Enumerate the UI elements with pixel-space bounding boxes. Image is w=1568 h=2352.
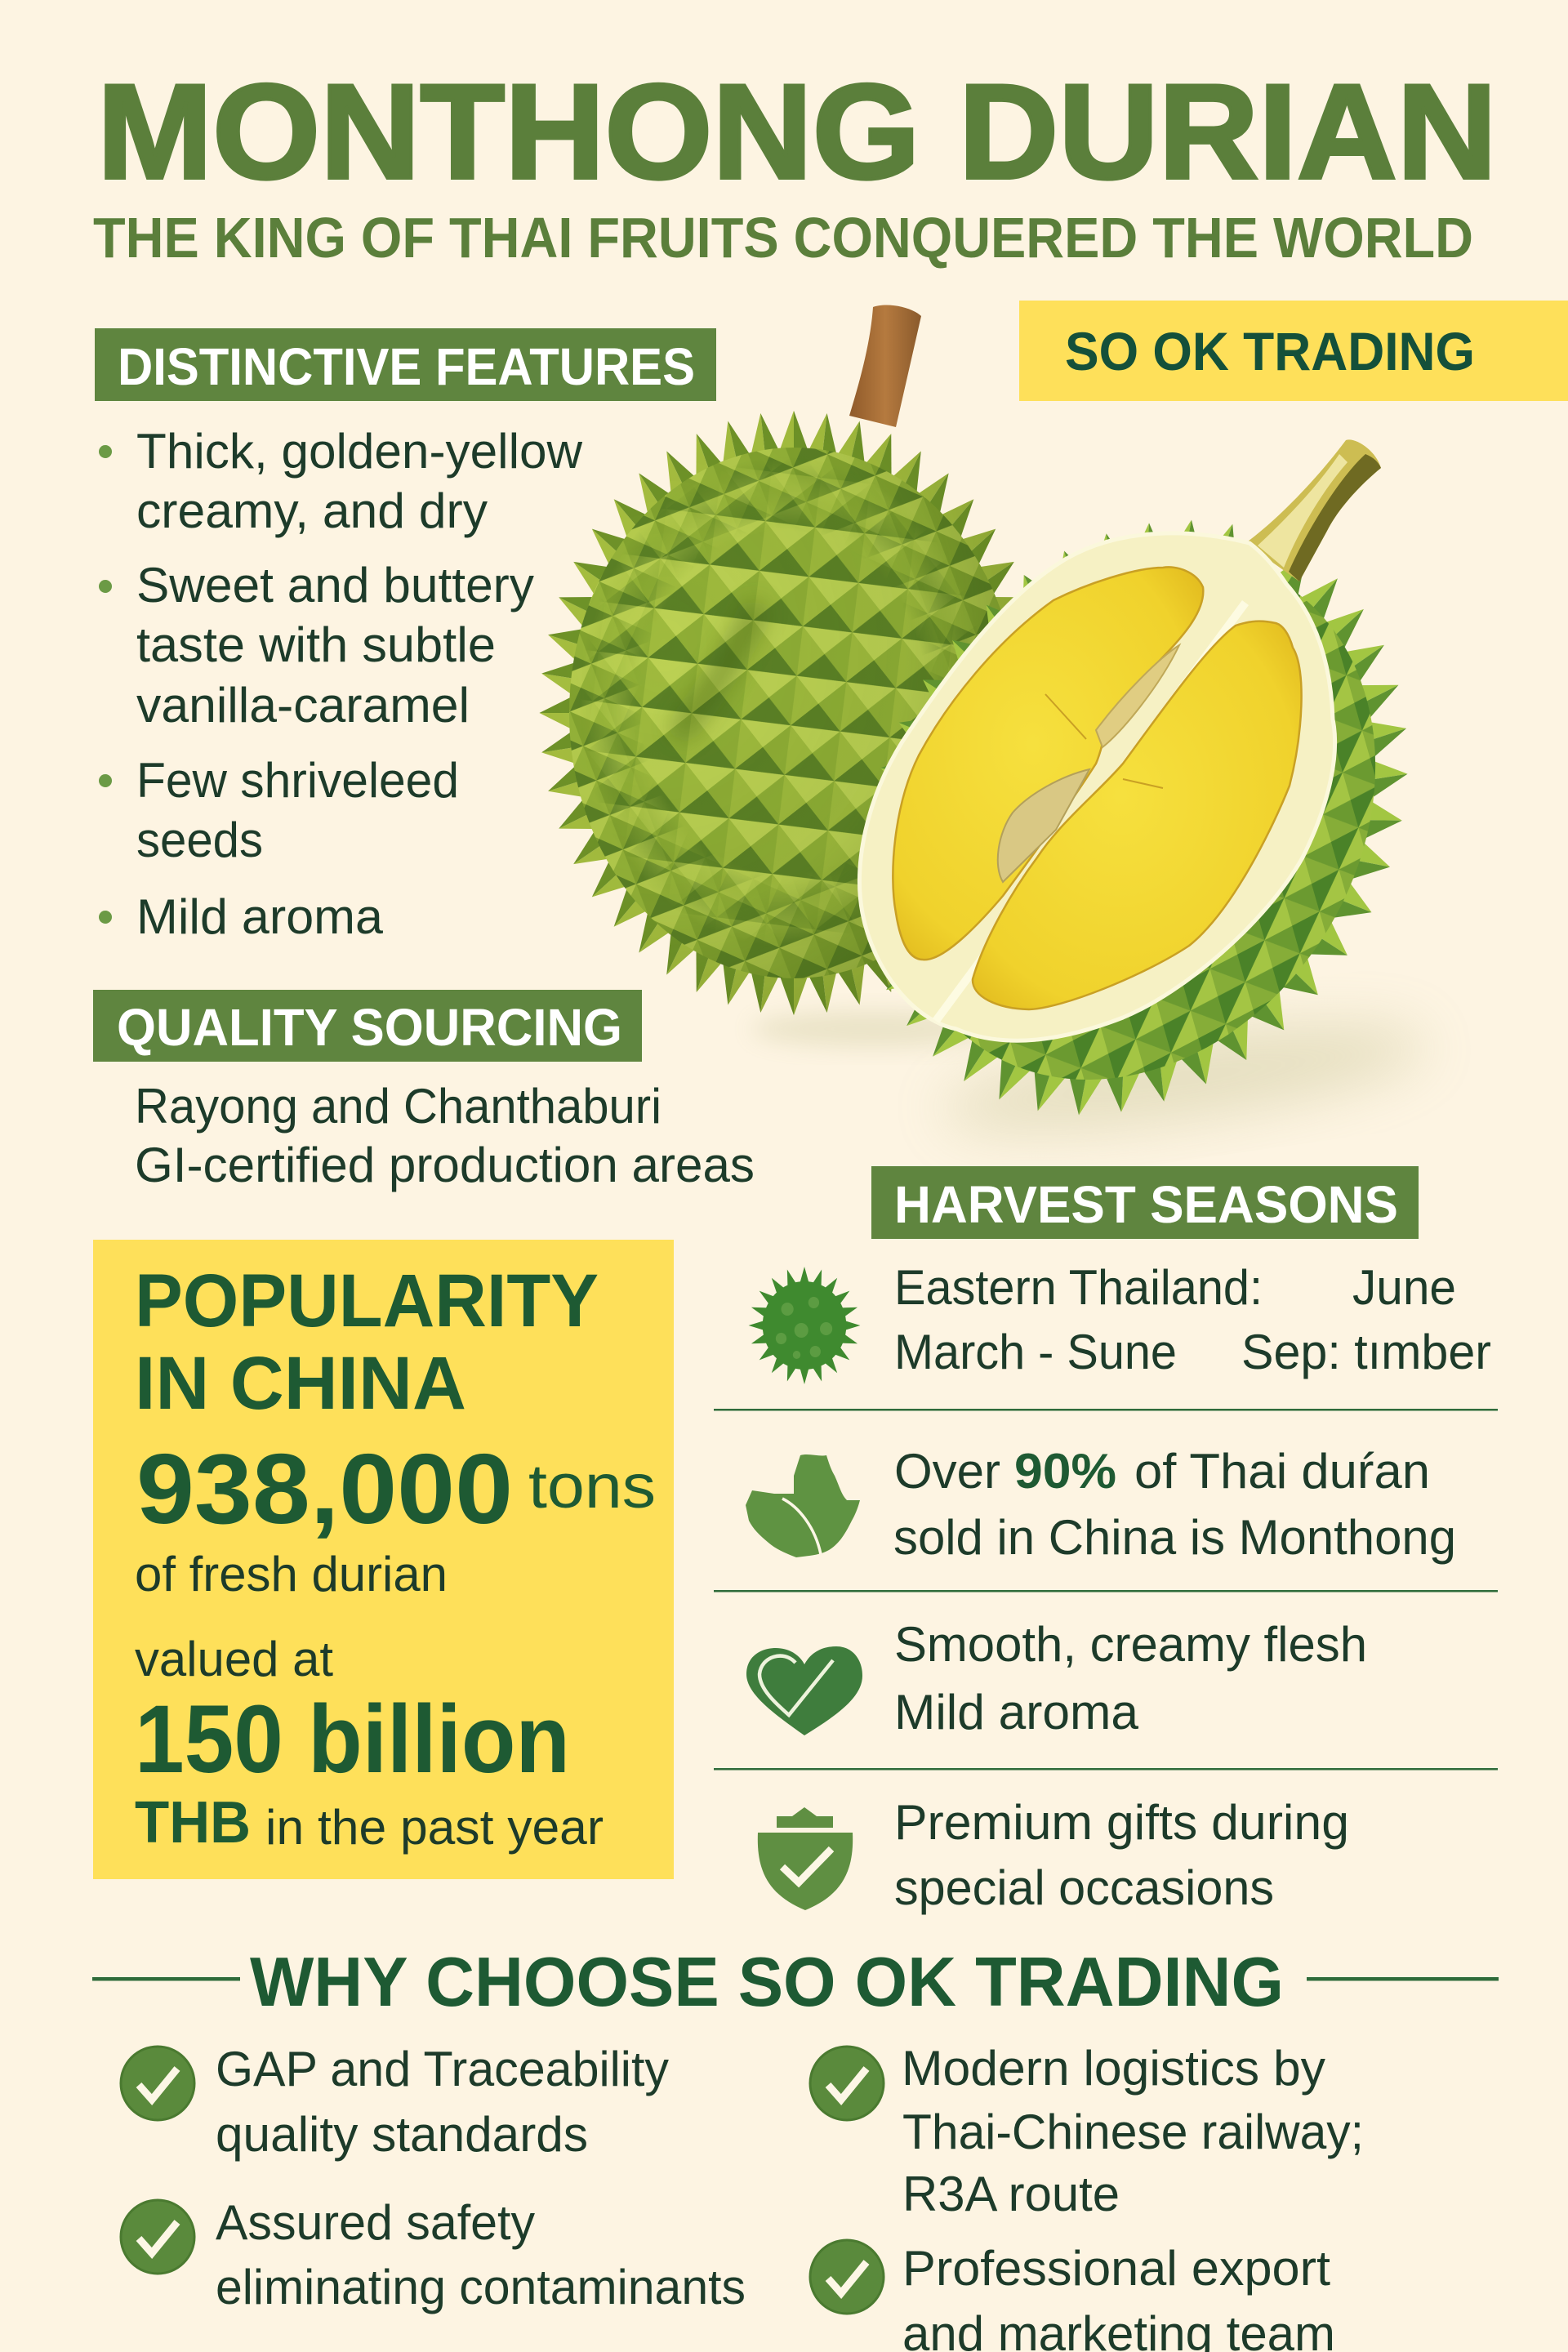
item: logistics: R3A route — [902, 2167, 1120, 2221]
seasons text — [894, 1260, 1491, 1379]
item: safety: eliminating contaminants — [216, 2260, 746, 2314]
item: safety: Assured safety — [216, 2195, 535, 2250]
badge: So OK Trading: SO OK TRADING — [1065, 321, 1475, 381]
item: GAP — [121, 2042, 669, 2162]
panel: why choose So OK Trading — [92, 1944, 1499, 2352]
whole durian — [539, 411, 1014, 1015]
market share text — [893, 1444, 1456, 1565]
stat: tons: of fresh durian — [135, 1547, 448, 1601]
market share text: of Thai duŕan — [1134, 1444, 1430, 1499]
section heading: WHY CHOOSE SO OK TRADING — [250, 1944, 1284, 2021]
panel: distinctive features — [95, 328, 716, 944]
panel heading — [135, 1259, 599, 1425]
sourcing text: GI-certified production areas — [135, 1138, 755, 1192]
sourcing text — [135, 1079, 755, 1192]
stat: tons: tons — [528, 1452, 656, 1521]
rind spikes — [708, 371, 1562, 1264]
title: MONTHONG DURIAN — [97, 56, 1497, 207]
cream rind — [860, 533, 1335, 1040]
halved durian — [708, 371, 1562, 1264]
seasons text: Sep: tımber — [1241, 1325, 1491, 1379]
item: GAP: quality standards — [216, 2107, 588, 2162]
bullet list: Thick, golden-yellow — [136, 424, 583, 479]
bullet list: Mild aroma — [136, 889, 384, 944]
stat: value: valued at — [135, 1632, 333, 1686]
stat: value: 150 billion — [135, 1686, 570, 1793]
bullet list: creamy, and dry — [136, 483, 488, 538]
market share text: 90% — [1014, 1444, 1116, 1499]
sourcing text: Rayong and Chanthaburi — [135, 1079, 662, 1134]
item: safety — [121, 2195, 746, 2314]
badge: So OK Trading — [1019, 301, 1568, 401]
gifts text: special occasions — [894, 1860, 1274, 1915]
heading: HARVEST SEASONS — [894, 1175, 1398, 1234]
bullet list — [99, 424, 583, 944]
item: GAP: GAP and Traceability — [216, 2042, 669, 2096]
flesh text: Mild aroma — [894, 1685, 1139, 1740]
bullet list: vanilla-caramel — [136, 678, 470, 733]
heading: DISTINCTIVE FEATURES — [118, 337, 695, 396]
market share text: Over — [894, 1444, 1000, 1499]
stat: value — [135, 1632, 604, 1855]
heading: QUALITY SOURCING — [117, 998, 622, 1057]
seasons text: March - Sune — [894, 1325, 1177, 1379]
row: flesh — [746, 1617, 1367, 1740]
row: seasons — [749, 1260, 1491, 1384]
stem of halved durian — [1245, 439, 1381, 581]
gifts text — [894, 1795, 1349, 1915]
flesh cracks — [1045, 694, 1163, 788]
right flesh lobe — [973, 621, 1302, 1009]
stat: tons — [135, 1433, 656, 1601]
seasons text: June — [1352, 1260, 1456, 1315]
panel heading: IN CHINA — [135, 1342, 466, 1425]
seasons text: Eastern Thailand: — [894, 1260, 1263, 1315]
row: market share — [746, 1444, 1456, 1565]
flesh text: Smooth, creamy flesh — [894, 1617, 1367, 1672]
row: gifts — [758, 1795, 1349, 1915]
ground shadow — [751, 1004, 1432, 1152]
bullet list: taste with subtle — [136, 617, 496, 672]
item: logistics: Modern logistics by — [902, 2041, 1325, 2096]
flesh text — [894, 1617, 1367, 1740]
panel: harvest seasons — [714, 1166, 1498, 1915]
panel heading: POPULARITY — [135, 1259, 599, 1343]
icon: heart with check — [746, 1646, 862, 1735]
icon: durian — [749, 1267, 860, 1384]
illustration: whole and halved durian — [461, 305, 1562, 1264]
item: logistics: Thai-Chinese railway; — [902, 2105, 1364, 2159]
seeds — [998, 645, 1179, 882]
item: logistics — [810, 2041, 1364, 2221]
panel: quality sourcing — [93, 990, 755, 1192]
bullet list: Sweet and buttery — [136, 558, 534, 612]
left flesh lobe — [893, 567, 1203, 960]
centre line — [936, 603, 1245, 1021]
item: team — [810, 2240, 1335, 2352]
gifts text: Premium gifts during — [894, 1795, 1349, 1850]
bullet list: seeds — [136, 813, 263, 867]
panel: popularity in China — [93, 1240, 674, 1879]
icon: map — [746, 1454, 860, 1557]
icon: shield with crown — [758, 1807, 853, 1910]
stat: tons: 938,000 — [136, 1433, 513, 1544]
subtitle: THE KING OF THAI FRUITS CONQUERED THE WORLD — [93, 206, 1473, 270]
market share text: sold in China is Monthong — [893, 1510, 1456, 1565]
whole durian stem — [849, 305, 921, 427]
item: team: Professional export — [902, 2241, 1330, 2296]
stat: value: THB — [135, 1790, 251, 1855]
stat: value: in the past year — [265, 1800, 604, 1855]
bullet list: Few shriveleed — [136, 753, 459, 808]
